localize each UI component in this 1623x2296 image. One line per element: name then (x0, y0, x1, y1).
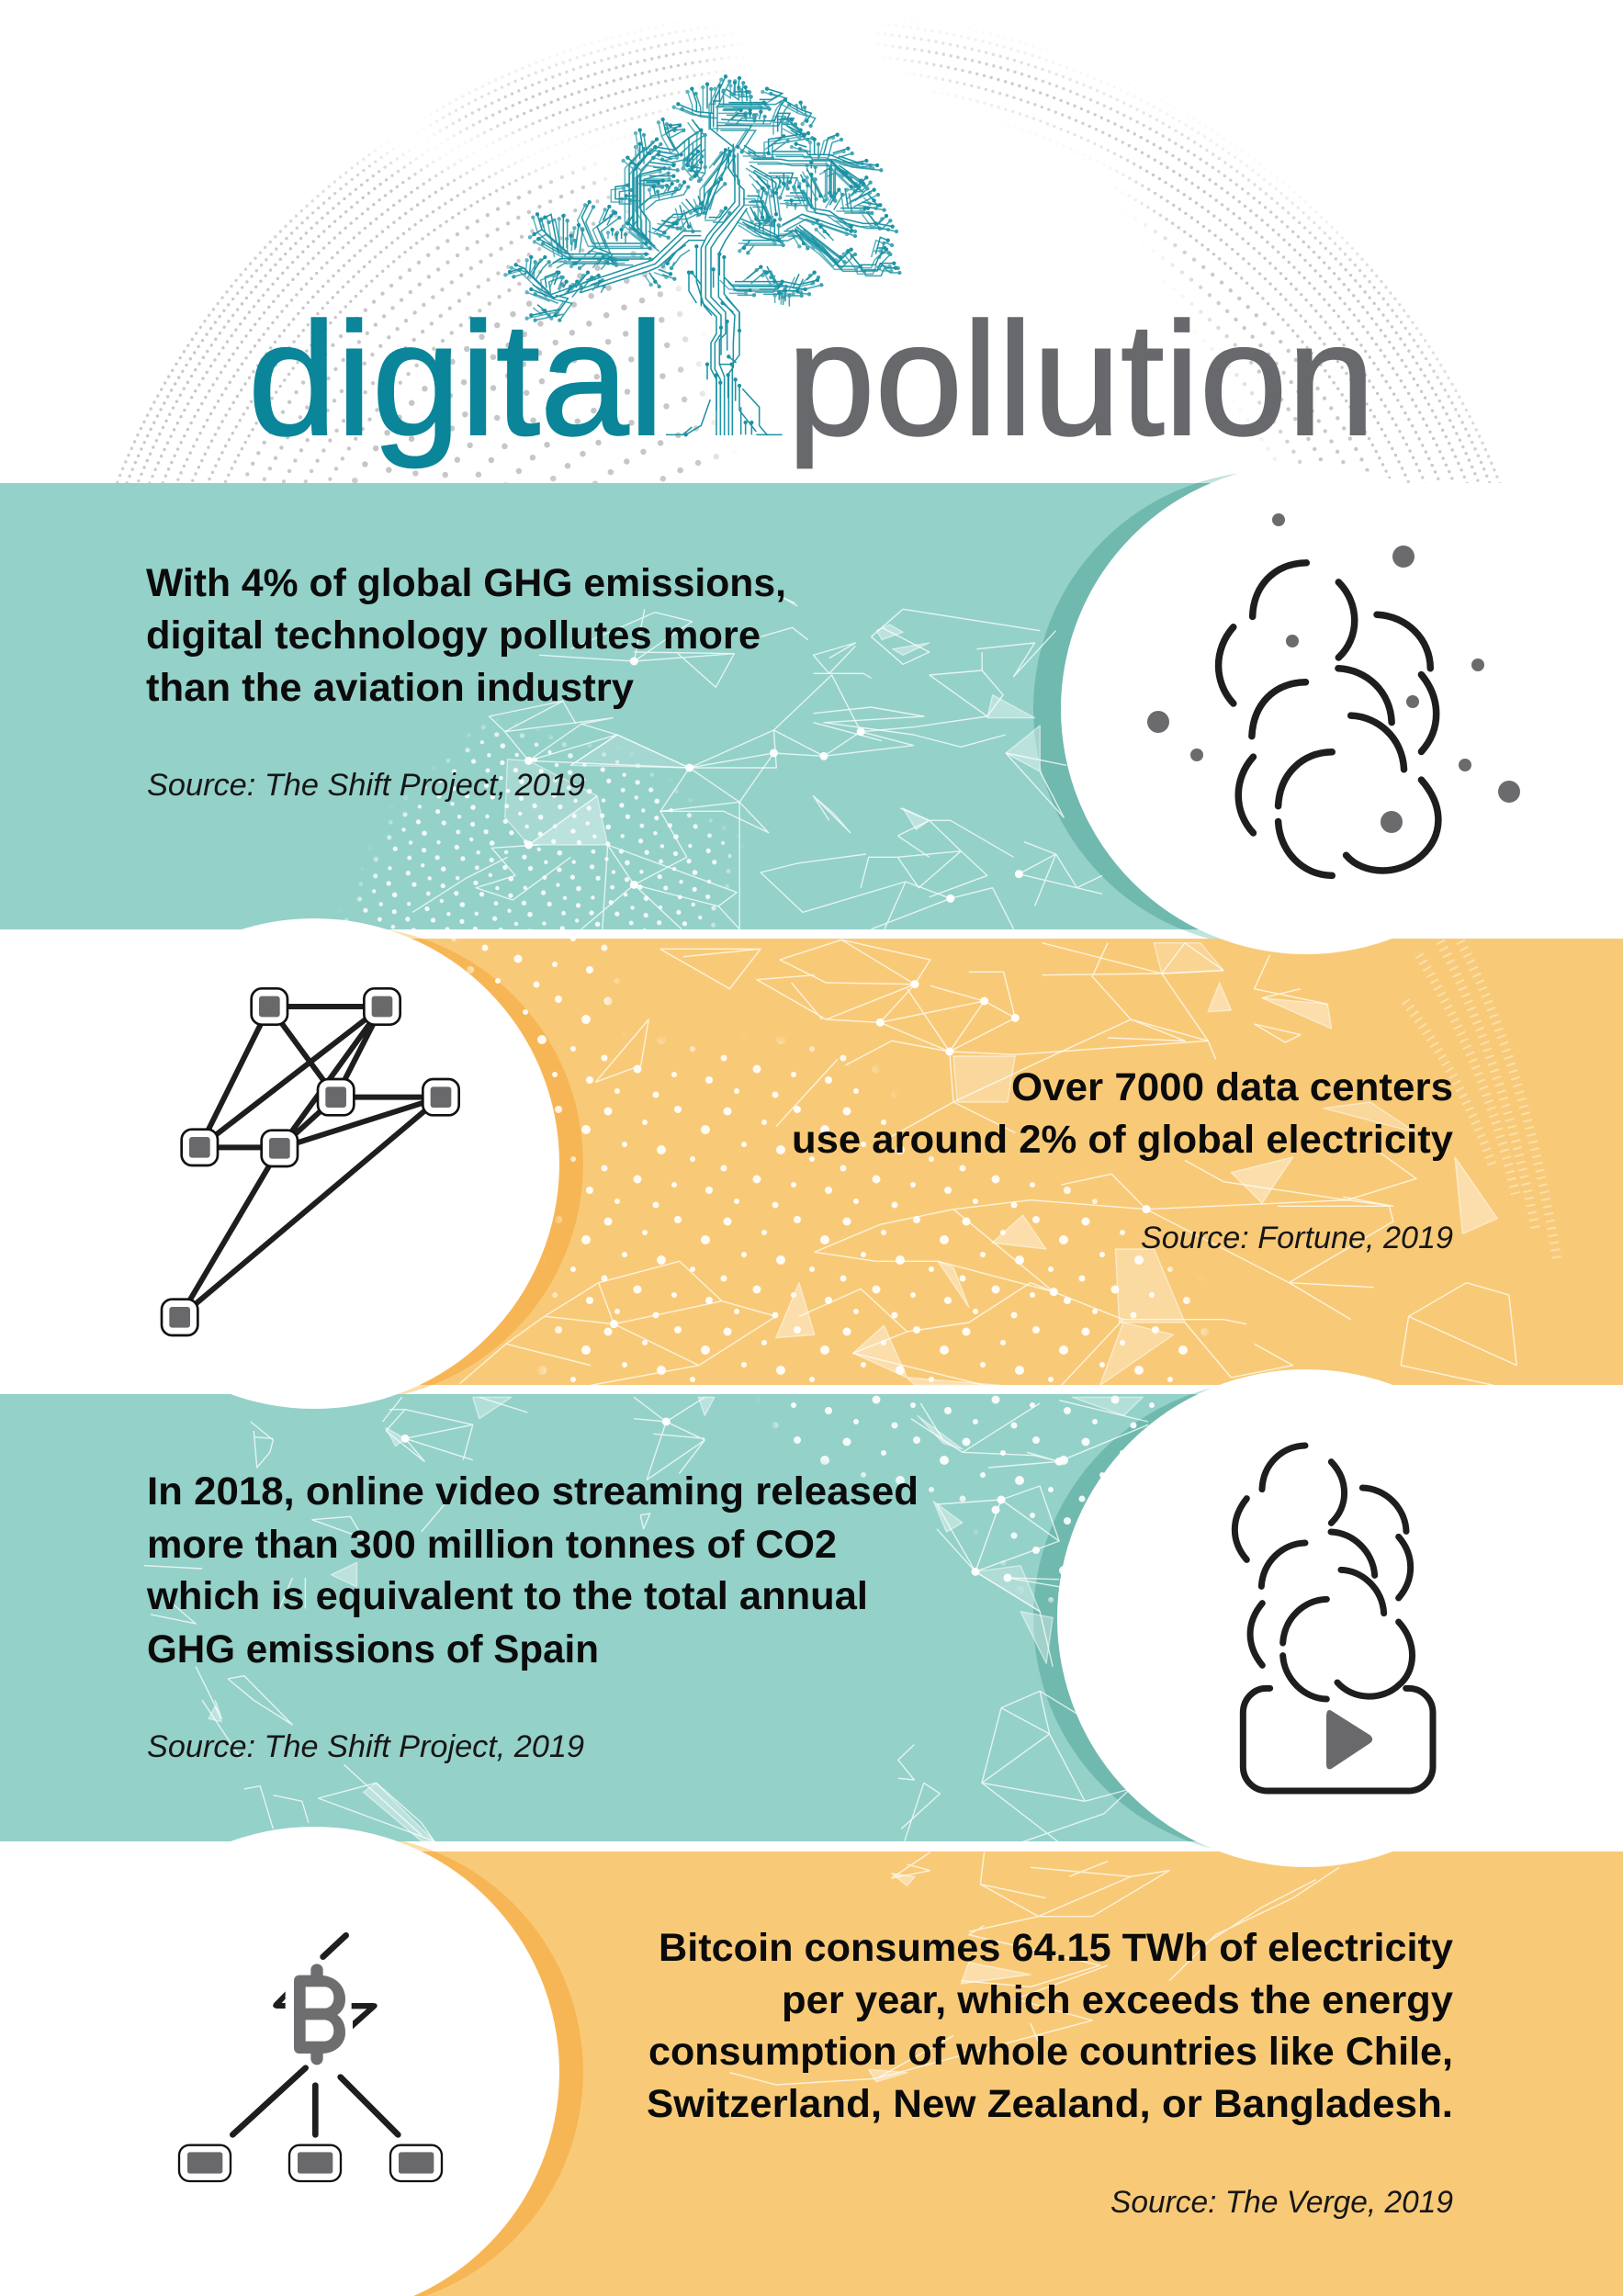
particle dots (1147, 513, 1520, 833)
text: video streaming statement: more than 300 million tonnes of CO2 (147, 1523, 837, 1567)
text: data centers statement: Over 7000 data centers (1011, 1065, 1453, 1109)
badge: smog particles icon (1061, 464, 1623, 954)
text: bitcoin statement: Switzerland, New Zealand, or Bangladesh. (647, 2082, 1453, 2126)
text: data centers statement (792, 1065, 1453, 1255)
dotted globe background (116, 26, 1501, 483)
pale crescent tips behind panels (107, 471, 1509, 2296)
text: video streaming statement: Source: The Shift Project, 2019 (147, 1729, 584, 1764)
play triangle (1326, 1710, 1372, 1769)
panel: band 1 teal (0, 483, 1211, 929)
smoke arcs and screen (1234, 1446, 1433, 1791)
title: circuit tree (505, 76, 899, 435)
title: digital: digital (248, 290, 664, 469)
badge: bitcoin network icon (0, 1827, 559, 2296)
text: GHG emissions statement: With 4% of global GHG emissions, (146, 561, 786, 605)
text: bitcoin statement (647, 1926, 1453, 2220)
text: bitcoin statement: consumption of whole countries like Chile, (648, 2030, 1453, 2074)
title: pollution: pollution (787, 290, 1375, 469)
network nodes (162, 988, 459, 1335)
smoke cloud arcs (1219, 563, 1438, 875)
text: data centers statement: use around 2% of global electricity (792, 1118, 1453, 1162)
connecting lines (232, 1935, 398, 2134)
text: bitcoin statement: per year, which exceeds the energy (782, 1978, 1453, 2022)
panel: band 4 orange (413, 1851, 1623, 2296)
lightning shards (273, 1991, 378, 2029)
badge: data center network icon (0, 918, 559, 1409)
text: video streaming statement: which is equivalent to the total annual (146, 1574, 868, 1618)
text: GHG emissions statement: Source: The Shift Project, 2019 (147, 768, 585, 803)
network links (180, 1007, 441, 1317)
text: data centers statement: Source: Fortune, 2019 (1141, 1221, 1453, 1255)
text: video streaming statement (146, 1469, 919, 1764)
text: bitcoin statement: Source: The Verge, 2019 (1110, 2185, 1453, 2220)
text: video streaming statement: In 2018, online video streaming released (147, 1469, 919, 1514)
badge: video streaming smoke icon (1057, 1369, 1623, 1867)
text: video streaming statement: GHG emissions of Spain (147, 1627, 599, 1671)
panel: band 2 orange (411, 939, 1623, 1385)
bitcoin symbol (294, 1964, 345, 2065)
panel: band 3 teal (0, 1394, 1198, 1841)
text: GHG emissions statement: digital technology pollutes more (146, 613, 761, 658)
bottom nodes (179, 2145, 442, 2181)
text: GHG emissions statement (146, 561, 786, 803)
text: bitcoin statement: Bitcoin consumes 64.15 TWh of electricity (659, 1926, 1453, 1970)
text: GHG emissions statement: than the aviation industry (146, 666, 634, 710)
